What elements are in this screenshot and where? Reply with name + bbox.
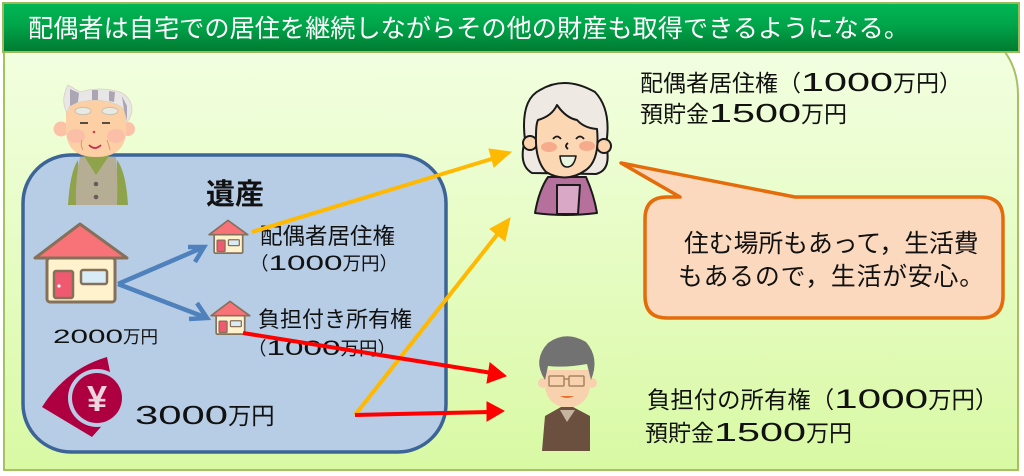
callout: speech bubble — [621, 163, 1003, 318]
arrows: house split — [118, 247, 207, 319]
panel: estate box — [23, 155, 446, 452]
arrows: spouse inheritance yellow — [252, 149, 511, 415]
icon: yen mark: ¥ — [87, 378, 107, 419]
text: burdened ownership: 負担付き所有権 — [258, 307, 412, 332]
text: burdened ownership — [248, 307, 412, 360]
text: spouse assets: 預貯金1500 万円 — [640, 98, 847, 128]
arrows: child inheritance red — [243, 333, 506, 421]
label: house value: 2000 万円 — [53, 326, 158, 348]
text: son assets — [645, 384, 998, 447]
text: spouse assets: 配偶者居住権（1000 万円） — [640, 67, 962, 97]
icon: small house burdened ownership — [211, 301, 250, 334]
icon: son — [538, 336, 597, 451]
title bar — [3, 3, 1019, 52]
icon: large house — [35, 224, 127, 302]
text: son assets: 負担付の所有権（1000 万円） — [647, 384, 998, 414]
icon: small house residence right — [209, 220, 248, 253]
icon: grandmother — [523, 83, 611, 215]
text: residence right — [250, 224, 398, 275]
text: son assets: 預貯金1500 万円 — [645, 417, 852, 447]
callout: speech bubble: 住む場所もあって，生活費 — [684, 230, 979, 258]
label: savings value: 3000 万円 — [135, 400, 275, 430]
title bar: 配偶者は自宅での居住を継続しながらその他の財産も取得できるようになる。 — [28, 15, 909, 43]
text: residence right: （1000 万円） — [250, 252, 398, 275]
icon: grandfather — [54, 85, 135, 205]
callout: speech bubble: もあるので，生活が安心。 — [678, 263, 984, 291]
text: spouse assets — [640, 67, 962, 128]
heading: estate: 遺産 — [206, 178, 264, 211]
text: residence right: 配偶者居住権 — [260, 224, 395, 249]
icon: yen mark — [42, 357, 126, 437]
text: burdened ownership: （1000 万円） — [248, 337, 396, 360]
